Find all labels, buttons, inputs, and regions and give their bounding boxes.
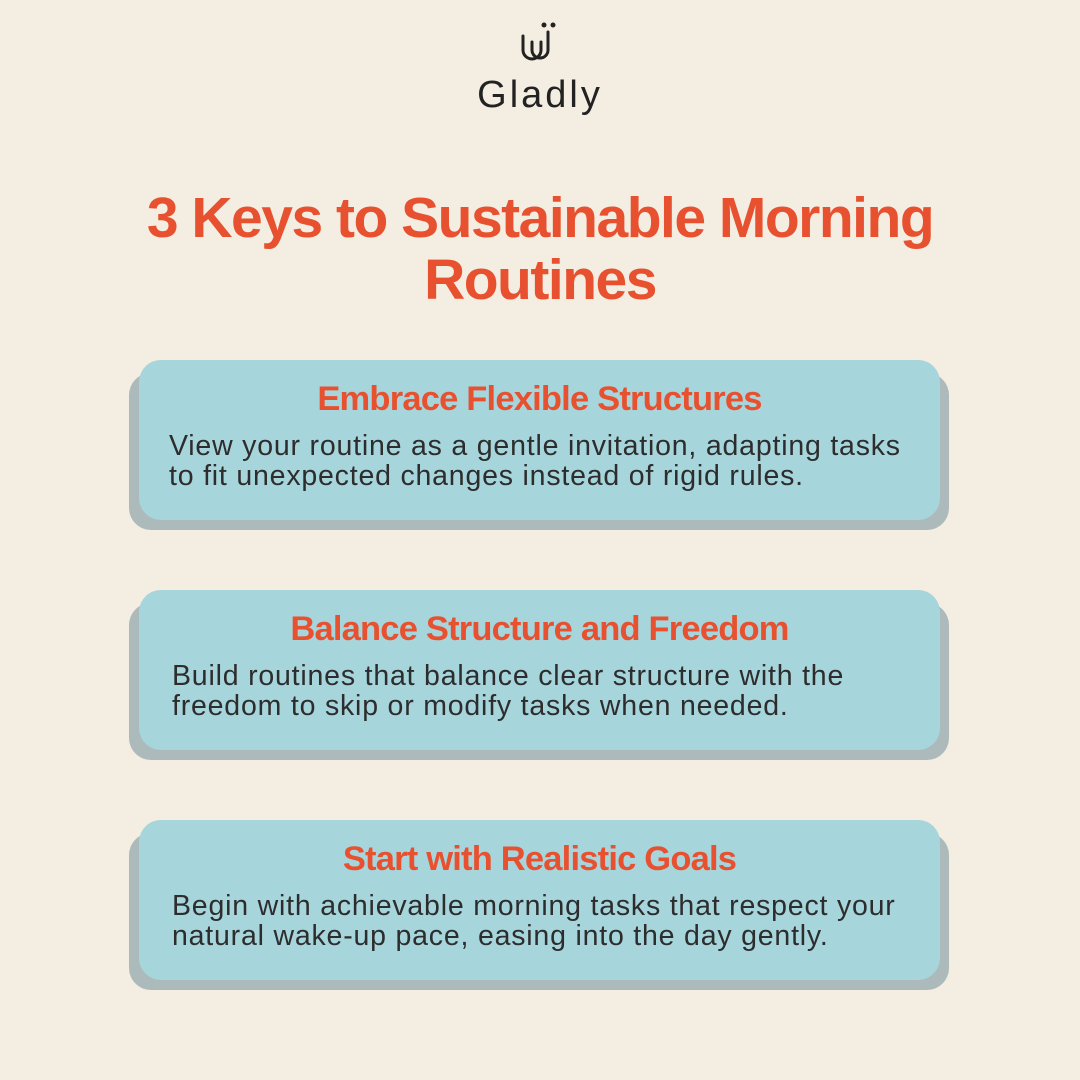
- text: card 1: to fit unexpected changes instead of rigid rules.: [169, 460, 804, 492]
- text: card 2: Build routines that balance clear structure with the: [172, 660, 844, 692]
- panel: card 1: [129, 360, 949, 530]
- panel: card 2: [129, 590, 949, 760]
- heading: card 1: Embrace Flexible Structures: [317, 380, 762, 418]
- text: card 3: Begin with achievable morning tasks that respect your: [172, 890, 896, 922]
- text: card 3: natural wake-up pace, easing into the day gently.: [172, 920, 829, 952]
- title: 3 Keys to Sustainable Morning: [147, 186, 933, 250]
- heading: card 3: Start with Realistic Goals: [343, 840, 736, 878]
- logo text: Gladly: [477, 74, 603, 116]
- logo: [477, 22, 603, 116]
- text: card 2: [172, 660, 844, 722]
- heading: card 2: Balance Structure and Freedom: [290, 610, 789, 648]
- panel: card 3: [129, 820, 949, 990]
- text: card 1: [169, 430, 901, 492]
- text: card 3: [172, 890, 896, 952]
- title: Routines: [424, 248, 656, 312]
- text: card 1: View your routine as a gentle invitation, adapting tasks: [169, 430, 901, 462]
- title: [147, 186, 933, 312]
- icon: logo mark: [522, 22, 556, 60]
- text: card 2: freedom to skip or modify tasks when needed.: [172, 690, 789, 722]
